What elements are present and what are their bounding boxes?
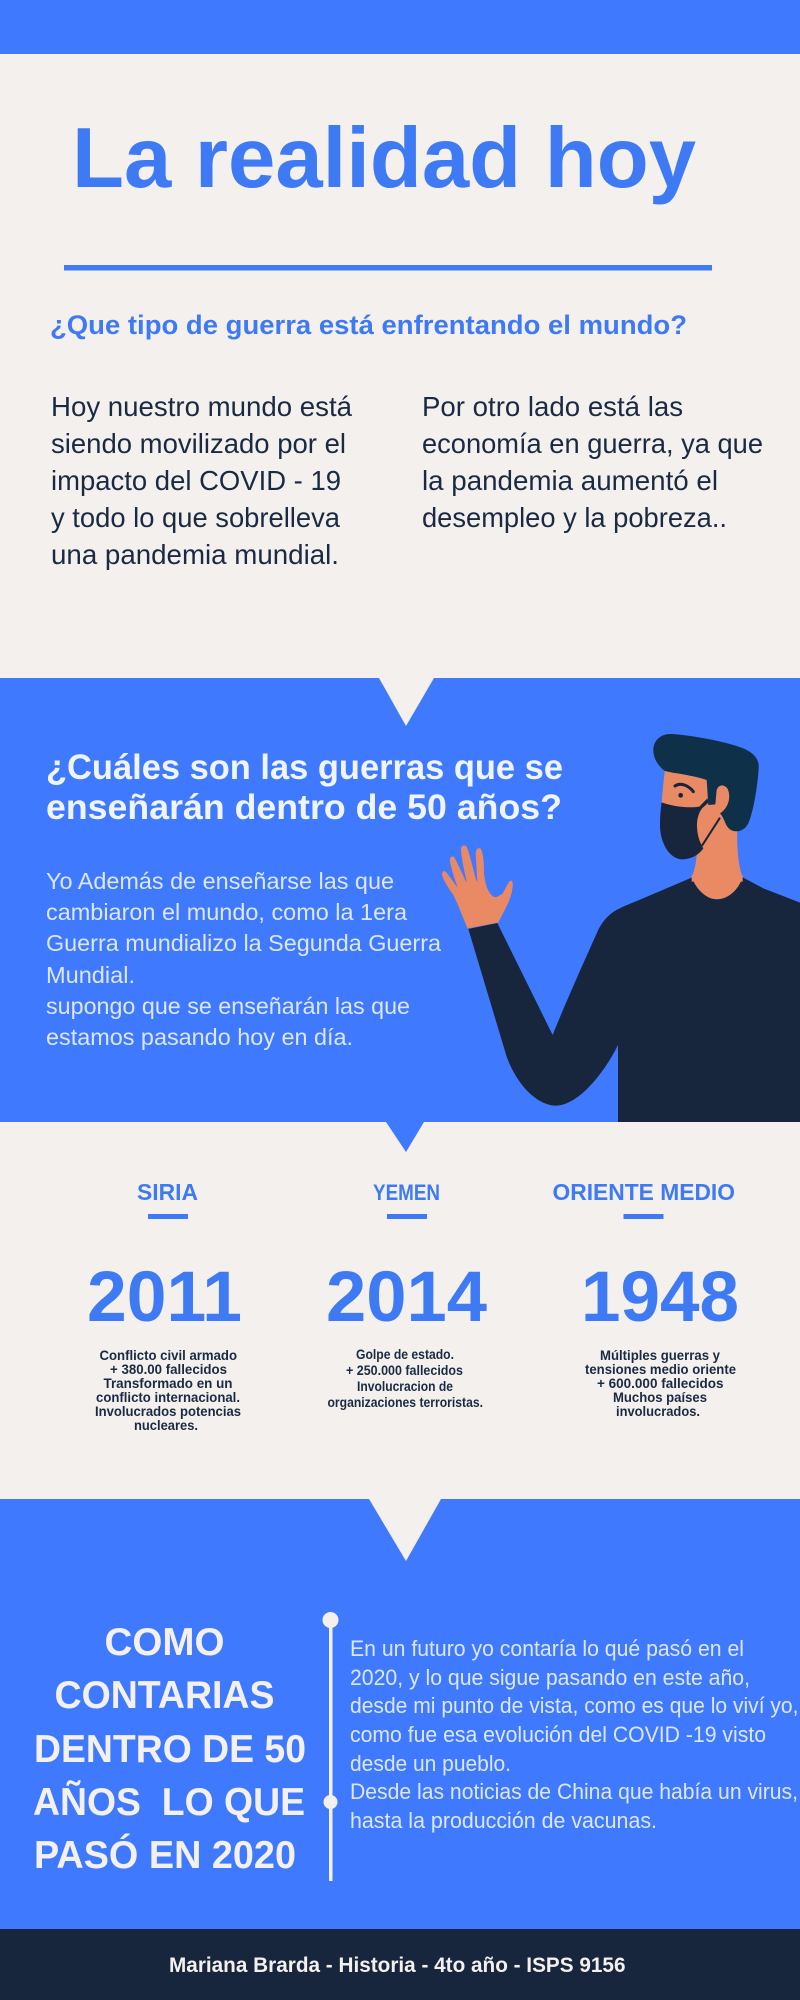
pointer triangle light xyxy=(369,1499,441,1561)
pointer triangle blue xyxy=(386,1122,424,1152)
column: Oriente Medio: 1948 xyxy=(581,1258,739,1337)
footer xyxy=(0,1929,800,2000)
text block: right column: economía en guerra, ya que xyxy=(422,428,763,459)
hand xyxy=(442,845,513,928)
panel: wars taught in 50 years xyxy=(0,678,800,1122)
heading: DENTRO DE 50 xyxy=(34,1728,306,1771)
heading: CONTARIAS xyxy=(54,1674,274,1717)
heading: PASÓ EN 2020 xyxy=(34,1833,296,1877)
text block: left column: impacto del COVID - 19 xyxy=(51,465,341,496)
text block: left column: y todo lo que sobrelleva xyxy=(51,502,340,533)
column: Yemen: Involucracion de xyxy=(357,1378,453,1394)
column: Siria: SIRIA xyxy=(137,1179,198,1205)
column: Oriente Medio: + 600.000 fallecidos xyxy=(597,1375,724,1391)
column: Yemen: 2014 xyxy=(326,1258,488,1337)
heading: ¿Cuáles son las guerras que se xyxy=(46,748,563,787)
paragraph xyxy=(46,868,442,1050)
column: Yemen: organizaciones terroristas. xyxy=(328,1394,483,1410)
text block: left column: Hoy nuestro mundo está xyxy=(51,391,352,422)
hair xyxy=(653,734,759,831)
column: Yemen: YEMEN xyxy=(373,1180,440,1205)
column: Siria: 2011 xyxy=(87,1258,242,1337)
text block: right column: desempleo y la pobreza.. xyxy=(422,502,727,533)
title rule xyxy=(64,265,712,270)
column: Siria: conflicto internacional. xyxy=(96,1389,240,1405)
paragraph: hasta la producción de vacunas. xyxy=(350,1808,657,1833)
heading xyxy=(46,748,563,827)
text block: right column: Por otro lado está las xyxy=(422,391,683,422)
column: Siria: + 380.00 fallecidos xyxy=(110,1361,227,1377)
footer: Mariana Brarda - Historia - 4to año - ISPS 9156 xyxy=(169,1954,626,1977)
illustration: man with mask waving xyxy=(442,734,800,1122)
paragraph: En un futuro yo contaría lo qué pasó en el xyxy=(350,1636,744,1661)
text block: right column: la pandemia aumentó el xyxy=(422,465,718,496)
torso and arm xyxy=(468,877,800,1122)
head xyxy=(653,734,759,882)
eye xyxy=(678,793,683,798)
text block: left column: siendo movilizado por el xyxy=(51,428,346,459)
heading xyxy=(33,1621,306,1877)
column: Yemen: Golpe de estado. xyxy=(356,1346,454,1362)
paragraph: cambiaron el mundo, como la 1era xyxy=(46,899,408,925)
column: Oriente Medio: involucrados. xyxy=(616,1403,700,1419)
column: Siria: Conflicto civil armado xyxy=(100,1347,237,1363)
paragraph: estamos pasando hoy en día. xyxy=(46,1024,353,1050)
heading: enseñarán dentro de 50 años? xyxy=(46,788,562,827)
pointer triangle light xyxy=(379,678,434,726)
paragraph: Mundial. xyxy=(46,962,135,988)
column: Oriente Medio: tensiones medio oriente xyxy=(585,1361,736,1377)
column: Oriente Medio: ORIENTE MEDIO xyxy=(552,1179,735,1205)
column: Oriente Medio: Muchos países xyxy=(613,1389,707,1405)
column: Siria: nucleares. xyxy=(134,1417,198,1433)
paragraph: desde un pueblo. xyxy=(350,1751,511,1776)
paragraph: 2020, y lo que sigue pasando en este año, xyxy=(350,1665,750,1690)
column: Siria xyxy=(87,1179,242,1433)
paragraph: Guerra mundializo la Segunda Guerra xyxy=(46,930,442,956)
column: Siria: Transformado en un xyxy=(104,1375,232,1391)
paragraph: supongo que se enseñarán las que xyxy=(46,993,410,1019)
heading: AÑOS LO QUE xyxy=(33,1780,305,1824)
paragraph: como fue esa evolución del COVID -19 visto xyxy=(350,1722,766,1747)
column: Siria: Involucrados potencias xyxy=(95,1403,241,1419)
timeline line with dots xyxy=(322,1612,338,1881)
column: Oriente Medio xyxy=(552,1179,739,1419)
subheading: ¿Que tipo de guerra está enfrentando el mundo? xyxy=(50,310,687,340)
column: Oriente Medio: Múltiples guerras y xyxy=(600,1347,720,1363)
mask xyxy=(660,798,709,859)
paragraph: Yo Además de enseñarse las que xyxy=(46,868,394,894)
mask strap xyxy=(702,818,720,846)
text block: left column xyxy=(51,391,352,570)
paragraph xyxy=(350,1636,798,1833)
column: Yemen: + 250.000 fallecidos xyxy=(346,1362,463,1378)
eyebrow xyxy=(675,784,693,792)
collar skin xyxy=(692,875,743,899)
heading: COMO xyxy=(104,1621,224,1664)
column: Yemen xyxy=(326,1180,488,1410)
title: La realidad hoy xyxy=(72,111,696,206)
text block: left column: una pandemia mundial. xyxy=(51,539,339,570)
text block: right column xyxy=(422,391,763,533)
panel: how would you tell it in 50 years xyxy=(0,1499,800,1929)
top blue band xyxy=(0,0,800,54)
face and neck skin xyxy=(662,770,743,882)
